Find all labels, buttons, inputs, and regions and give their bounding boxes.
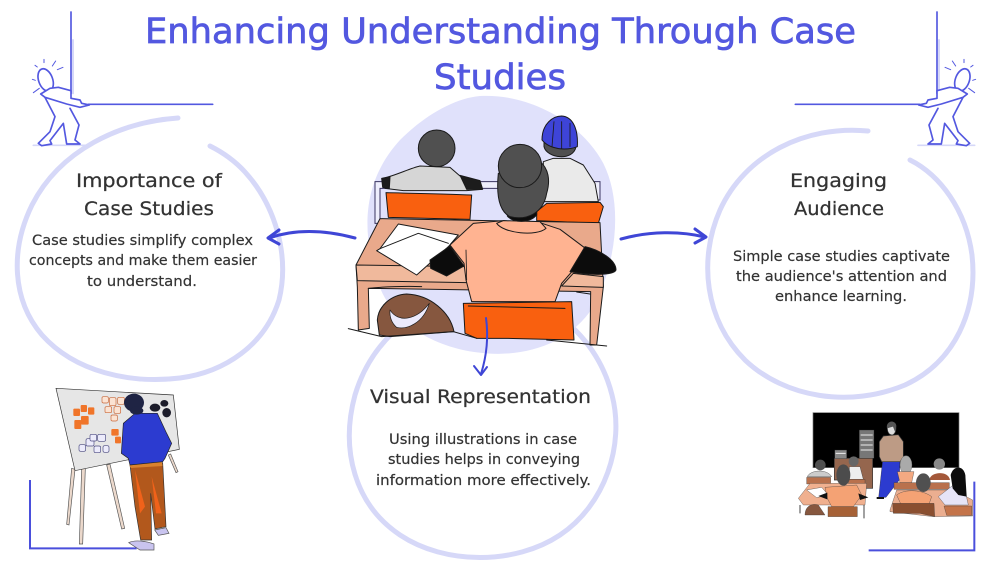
arrow: to engaging bbox=[621, 229, 706, 243]
floor line bbox=[348, 329, 607, 346]
left pushing figure and frame bbox=[32, 12, 213, 146]
arrow: to visual representation bbox=[474, 318, 487, 375]
lilac notes bbox=[79, 434, 109, 453]
panel: importance of case studies: concepts and make them easier bbox=[29, 253, 257, 269]
left students bbox=[815, 460, 826, 470]
front chair bbox=[463, 302, 574, 340]
panel: importance of case studies bbox=[29, 170, 257, 290]
front student bbox=[430, 144, 616, 302]
panel: visual representation bbox=[370, 386, 591, 489]
panel: visual representation: information more effectively. bbox=[376, 473, 591, 489]
corner frame bbox=[30, 480, 137, 548]
illustration: classroom with teacher bbox=[798, 413, 974, 550]
back left student bbox=[382, 130, 483, 191]
panel: engaging audience: Audience bbox=[794, 198, 884, 220]
right pushing figure and frame bbox=[795, 12, 976, 146]
teacher bbox=[879, 460, 900, 497]
central illustration: students at desks bbox=[348, 96, 616, 354]
circle outline: visual representation bbox=[349, 300, 616, 558]
desk bbox=[356, 219, 603, 345]
panel: engaging audience: Simple case studies captivate bbox=[733, 249, 950, 265]
panel: importance of case studies: Case studies simplify complex bbox=[32, 233, 253, 249]
panel: visual representation: studies helps in conveying bbox=[388, 452, 580, 468]
blackboard bbox=[813, 413, 959, 468]
circle outline: importance bbox=[17, 118, 283, 379]
peach notes bbox=[102, 397, 124, 421]
title: Studies bbox=[434, 58, 566, 98]
panel: visual representation: Using illustrations in case bbox=[389, 432, 577, 448]
back chairs bbox=[386, 193, 472, 219]
back rail bbox=[375, 182, 600, 223]
teacher desk and books bbox=[834, 458, 873, 488]
background blob bbox=[367, 96, 615, 354]
panel: engaging audience bbox=[733, 170, 950, 305]
panel: importance of case studies: to understand. bbox=[87, 274, 197, 290]
paper bbox=[377, 224, 458, 275]
circle outline: engaging bbox=[708, 130, 973, 397]
illustration: person at board bbox=[30, 388, 179, 550]
person bbox=[130, 463, 166, 540]
panel: visual representation: Visual Representation bbox=[370, 386, 591, 408]
dark notes bbox=[150, 400, 171, 417]
panel: engaging audience: enhance learning. bbox=[775, 289, 907, 305]
bag bbox=[377, 294, 454, 337]
panel: importance of case studies: Importance of bbox=[76, 170, 223, 192]
title bbox=[145, 12, 856, 98]
panel: engaging audience: the audience's attention and bbox=[736, 269, 947, 285]
corner frame bbox=[869, 482, 974, 550]
panel: engaging audience: Engaging bbox=[790, 170, 887, 192]
panel: importance of case studies: Case Studies bbox=[84, 198, 214, 220]
orange notes bbox=[73, 405, 121, 443]
right students bbox=[900, 456, 912, 474]
board bbox=[56, 388, 179, 471]
title: Enhancing Understanding Through Case bbox=[145, 12, 856, 52]
easel legs bbox=[67, 454, 178, 544]
arrow: to importance bbox=[268, 230, 355, 244]
back right student bbox=[542, 116, 598, 202]
